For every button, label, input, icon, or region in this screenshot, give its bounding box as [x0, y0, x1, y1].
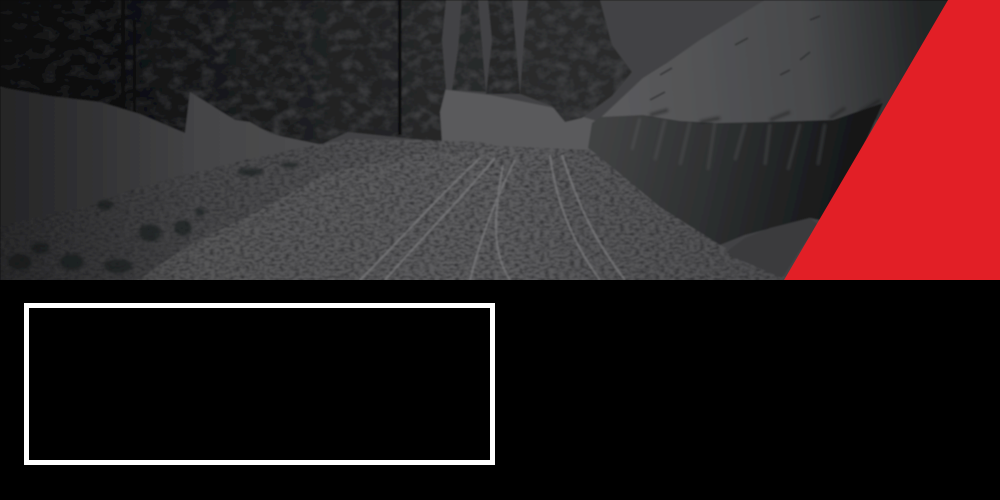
left snow bank: [0, 86, 320, 226]
forest left shadow: [0, 0, 401, 132]
forest: [0, 0, 632, 146]
tree trunks: [121, 0, 402, 135]
icicle streaks on wall: [632, 118, 825, 170]
photo: snowy forest road: [0, 0, 1000, 285]
snow chunks at wall base: [726, 250, 782, 278]
snow wall top: [593, 0, 950, 126]
snow wall face: [588, 103, 883, 245]
sky: [32, 0, 878, 278]
left plowed snow berm: [0, 139, 510, 285]
distant snow clearing: [440, 90, 595, 150]
left dark vignette: [0, 86, 162, 280]
ski tracks on road: [360, 155, 625, 280]
white outlined empty frame: [26, 306, 492, 462]
dark ragged top of wall: [650, 100, 880, 122]
dark shadow patches on wall top: [650, 16, 820, 100]
red diagonal accent shape: [784, 0, 1000, 280]
road: [138, 146, 782, 280]
berm dark clods: [8, 162, 299, 273]
black lower band: [0, 280, 1000, 500]
